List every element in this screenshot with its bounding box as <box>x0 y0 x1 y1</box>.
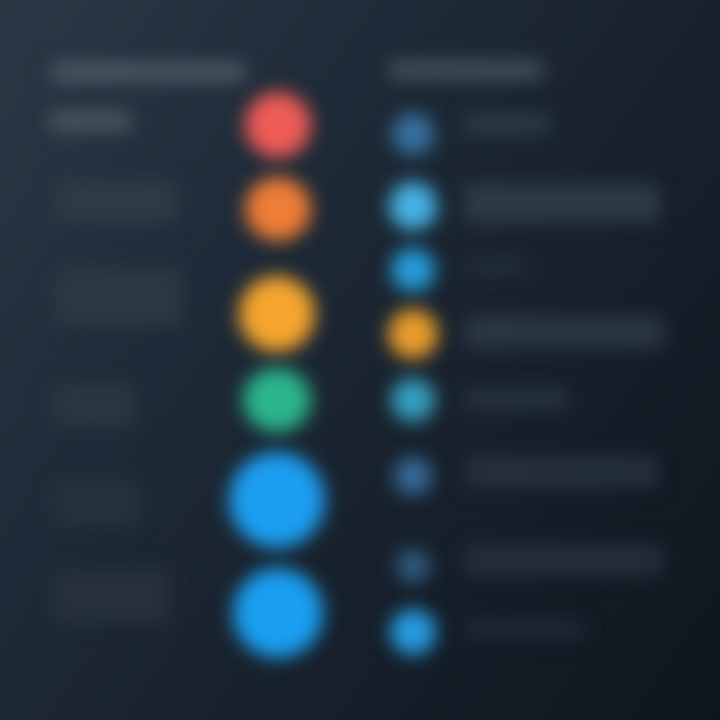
dot: teal blue <box>391 378 435 422</box>
dot: blue large lower <box>233 568 323 658</box>
right row 8 label <box>464 620 586 638</box>
left row 1 label <box>48 110 132 132</box>
dot: red <box>245 92 311 158</box>
right row 3 label <box>464 258 530 274</box>
left row 5 label <box>52 480 140 526</box>
right row 7 label <box>464 544 664 576</box>
right row 4 label <box>464 316 664 348</box>
dot: light blue <box>389 182 437 230</box>
left row 2 label <box>54 180 178 222</box>
right row 6 label <box>464 456 658 488</box>
dot: blue large <box>229 452 325 548</box>
dot: muted blue 1 <box>392 113 434 155</box>
dot: bright blue <box>391 248 435 292</box>
right row 1 label <box>462 114 550 134</box>
dot: amber <box>239 276 315 352</box>
dot: bright blue lower <box>390 609 436 655</box>
dot: amber small <box>388 309 438 359</box>
right row 2 label <box>464 184 660 222</box>
left row 3 label <box>54 268 182 326</box>
heading: right column <box>388 60 544 80</box>
left row 4 label <box>52 382 136 428</box>
left row 6 label <box>52 568 170 622</box>
dot: muted blue 2 <box>394 457 432 495</box>
dot: green <box>243 368 311 432</box>
heading: left column <box>50 62 246 82</box>
right row 5 label <box>464 388 570 410</box>
dot: muted blue 3 <box>396 549 430 583</box>
dot: orange <box>245 177 311 241</box>
